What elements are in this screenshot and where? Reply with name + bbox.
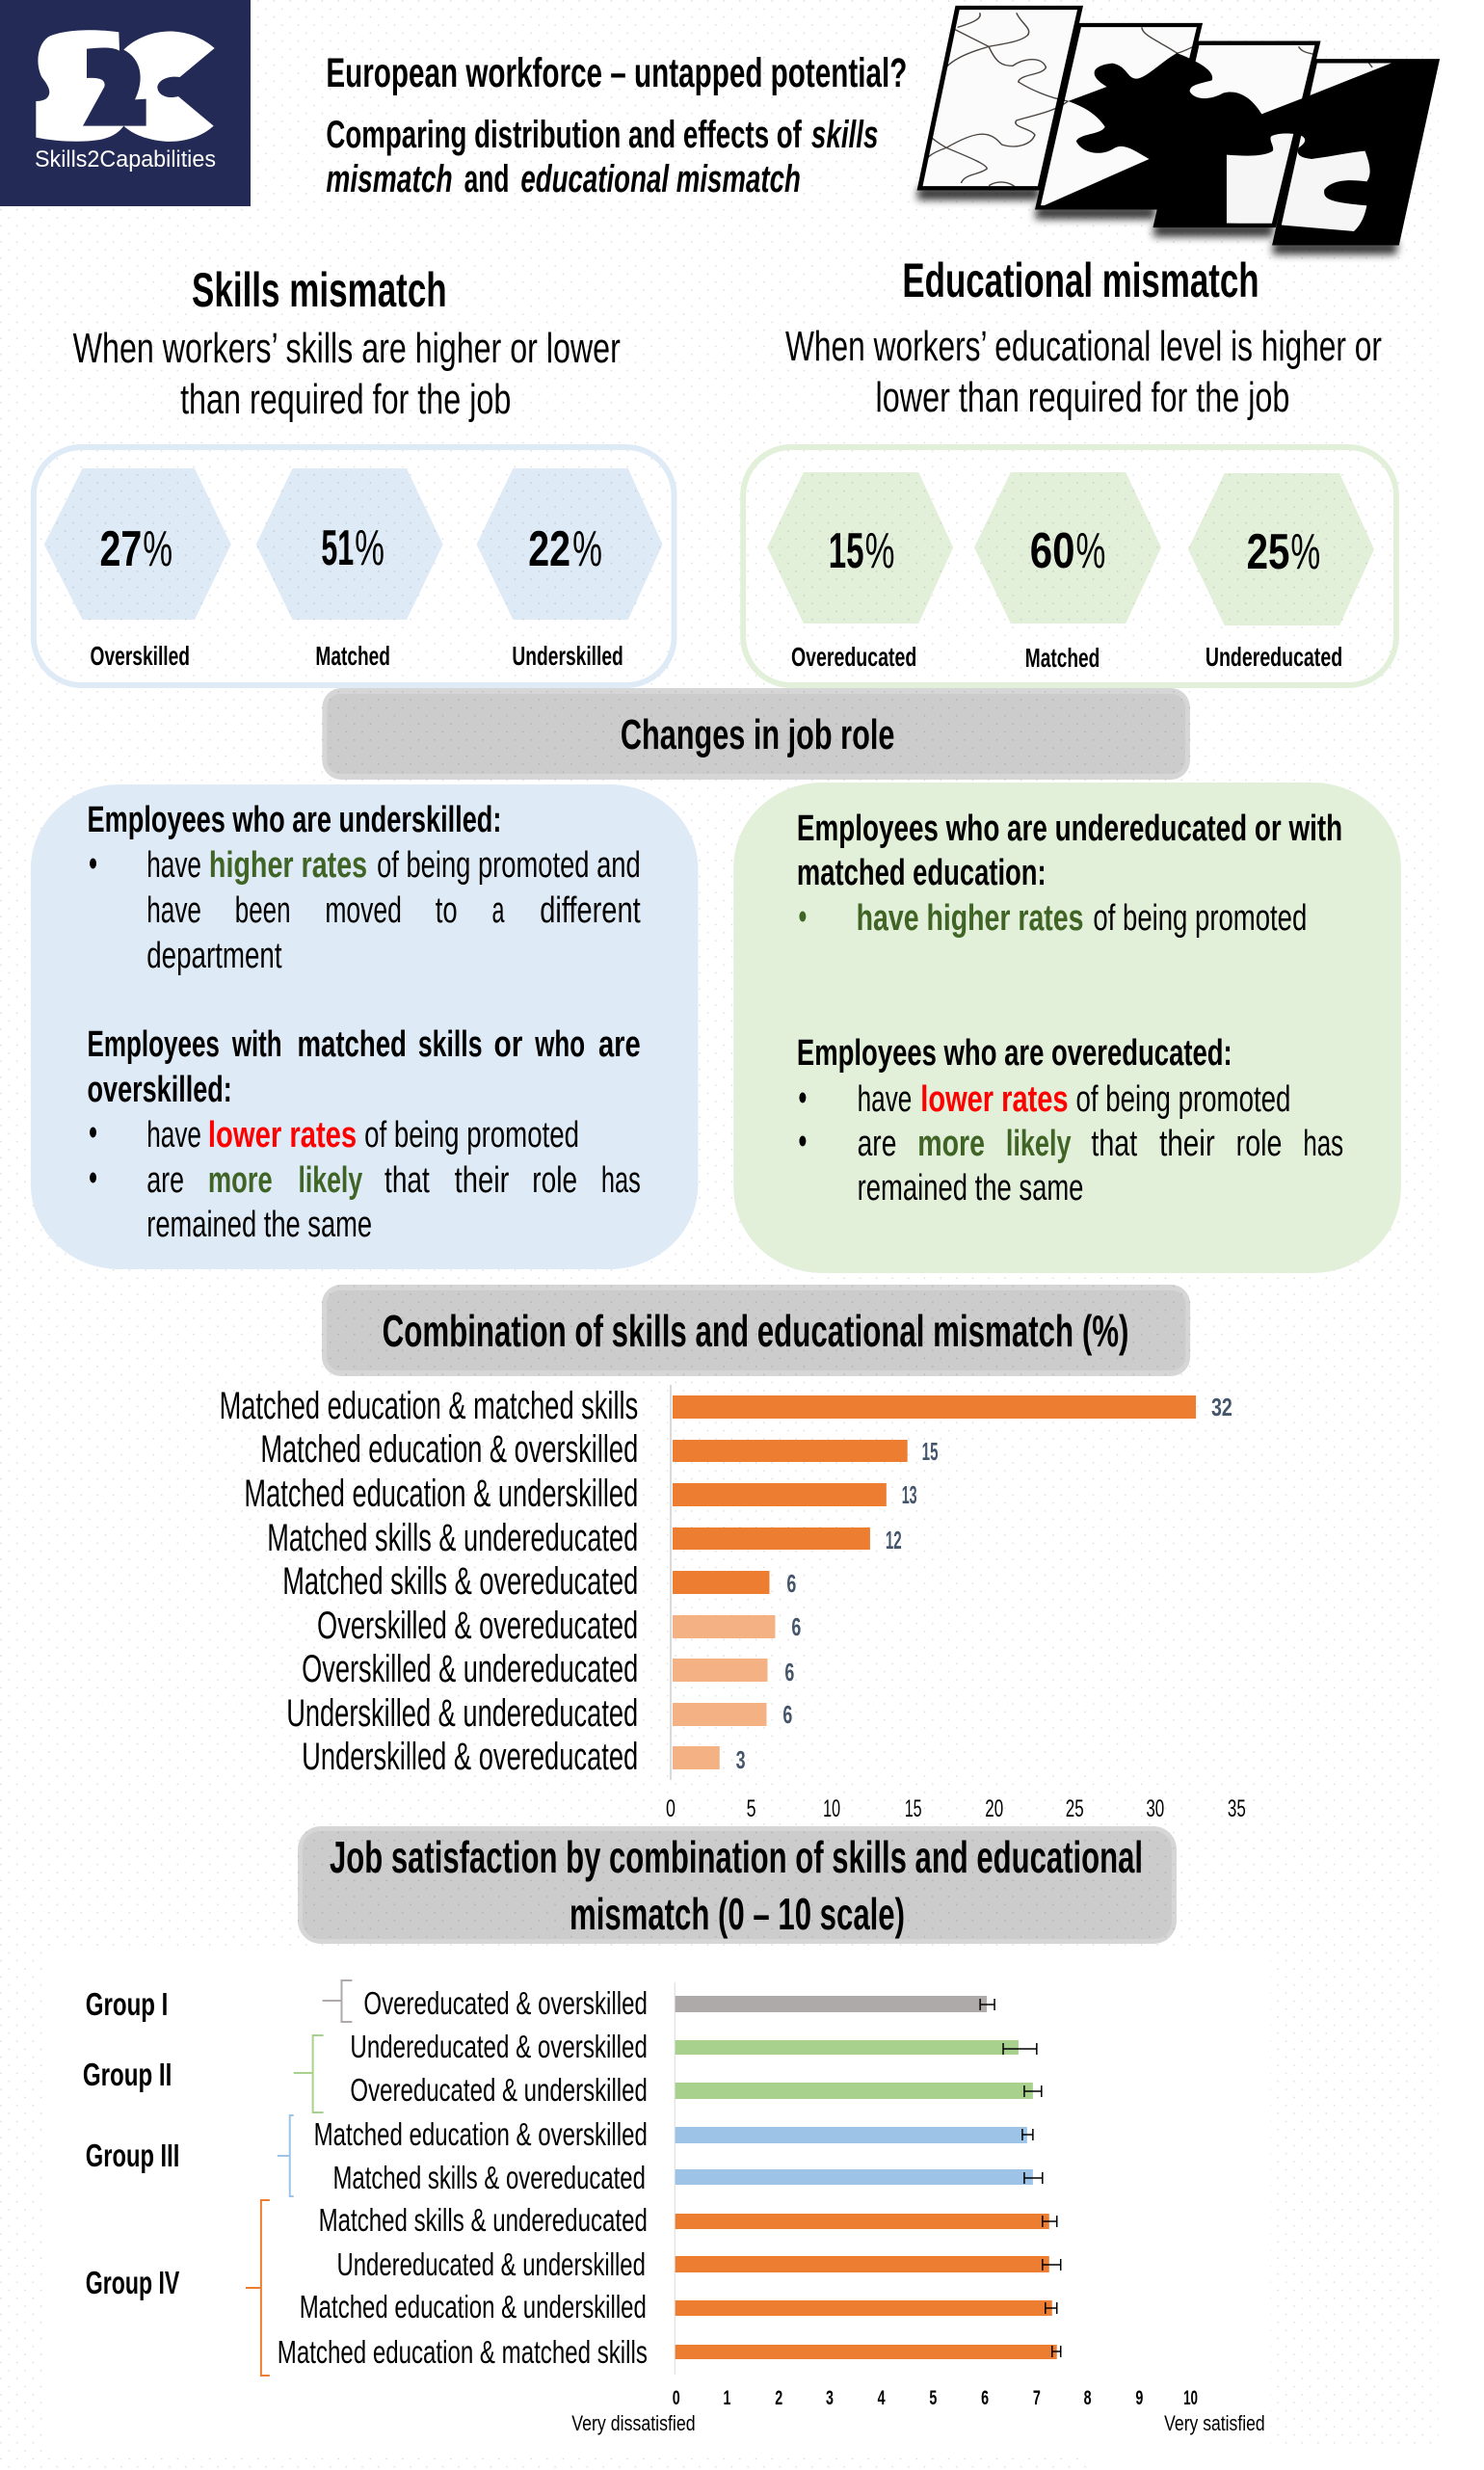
row: Overskilled & overeducated, 6: Overskilled & overeducated <box>317 1605 638 1647</box>
row: Matched education & matched skills, 32: Matched education & matched skills <box>220 1385 638 1427</box>
text: educational mismatch definition <box>785 323 1382 421</box>
title block: European workforce – untapped potential? <box>326 50 907 96</box>
heading: Educational mismatch: Educational mismatch <box>902 253 1259 307</box>
stat: 25% undereducated: Undereducated <box>1206 642 1342 672</box>
text: matched or overskilled employees: or <box>493 1024 523 1065</box>
stat: 15% overeducated: Overeducated <box>791 642 916 672</box>
title block: Comparing distribution and effects of <box>326 114 802 156</box>
row: Matched education & matched skills, 32: 32 <box>1211 1394 1232 1421</box>
row: Overskilled & undereducated, 6: Overskilled & undereducated <box>302 1648 638 1690</box>
row: Matched education & underskilled, 13: Matched education & underskilled <box>244 1473 638 1515</box>
row: Matched education & underskilled, 13: 13 <box>902 1482 917 1509</box>
row: Matched skills & overeducated: Matched skills & overeducated <box>333 2160 646 2195</box>
text: skills mismatch definition: When workers’ skills are higher or lower <box>73 325 621 372</box>
row: Matched education & matched skills, 32 <box>220 1385 1232 1427</box>
text: matched or overskilled employees: that <box>384 1160 430 1201</box>
stat: 60% matched: 60 <box>1030 522 1075 578</box>
x axis labels: 5 <box>747 1795 756 1822</box>
heading: Changes in job role: Changes in job role <box>621 711 894 758</box>
title block: skills <box>811 114 879 156</box>
text: overeducated employees: role <box>1236 1124 1282 1164</box>
text: underskilled employees: different <box>540 890 641 931</box>
row: Matched skills & undereducated, 12: 12 <box>886 1527 902 1554</box>
x axis labels: 30 <box>1146 1795 1164 1822</box>
stat: 60% matched: Matched <box>1025 643 1100 673</box>
text: underskilled employees: moved <box>325 890 402 931</box>
stat: 25% undereducated: % <box>1290 523 1320 579</box>
text: overeducated employees: Employees who are overeducated: <box>797 1033 1232 1074</box>
group labels: Group II <box>83 2057 172 2092</box>
chart axis line <box>670 1385 672 1780</box>
section: combination of mismatch <box>220 1285 1246 1822</box>
x axis labels: 5 <box>929 2387 938 2409</box>
panel: skills distribution <box>34 447 675 685</box>
x axis labels: 35 <box>1228 1795 1246 1822</box>
stat: 15% overeducated: % <box>865 522 894 578</box>
text: matched or overskilled employees: skills <box>418 1024 483 1065</box>
row: Underskilled & undereducated, 6: Underskilled & undereducated <box>286 1692 638 1735</box>
row: Overeducated & underskilled: Overeducated & underskilled <box>350 2072 648 2108</box>
heading: Job satisfaction by combination <box>298 1826 1177 1944</box>
row: Undereducated & underskilled: Undereducated & underskilled <box>336 2246 646 2282</box>
title block <box>326 50 907 200</box>
logo: Skills2Capabilities <box>0 0 251 206</box>
text: matched or overskilled employees: lower rates <box>208 1115 357 1155</box>
row: Overskilled & undereducated, 6: 6 <box>784 1660 794 1687</box>
row: Matched skills & overeducated, 6: Matched skills & overeducated <box>282 1560 638 1603</box>
x axis labels: 8 <box>1084 2387 1092 2409</box>
stat: 22% underskilled: % <box>572 520 602 576</box>
x axis labels: 10 <box>823 1795 840 1822</box>
text: underskilled employees: a <box>491 890 505 931</box>
text: overeducated employees: of being promoted <box>1076 1079 1290 1120</box>
text: matched or overskilled employees: has <box>601 1160 641 1201</box>
text: matched or overskilled employees: Employees <box>88 1024 220 1065</box>
scale label: Very dissatisfied: Very dissatisfied <box>571 2411 696 2435</box>
title block: mismatch <box>326 158 453 200</box>
heading: Combination of skills and educational mismatch: Combination of skills and educational mismatch (%) <box>383 1306 1128 1356</box>
text: underskilled employees: of being promoted and <box>377 845 641 886</box>
group labels: Group I <box>86 1986 168 2022</box>
stat: 15% overeducated: 15 <box>829 522 864 578</box>
text: educational mismatch definition: lower than required for the job <box>876 374 1289 421</box>
text: overeducated employees <box>797 1033 1343 1208</box>
text: underskilled employees: have <box>146 890 201 931</box>
text: matched or overskilled employees: role <box>532 1160 577 1201</box>
text: matched or overskilled employees: likely <box>298 1160 362 1201</box>
x axis labels: 0 <box>673 2387 680 2409</box>
row: Matched education & matched skills: Matched education & matched skills <box>278 2334 648 2370</box>
stat: 27% overskilled: Overskilled <box>91 641 190 671</box>
text: undereducated or matched employees: have higher rates <box>857 898 1083 939</box>
row: Undereducated & overskilled <box>350 2029 1037 2064</box>
text: matched or overskilled employees: of being promoted <box>364 1115 579 1155</box>
text: undereducated or matched employees: of being promoted <box>1093 898 1307 939</box>
x axis labels <box>673 2387 1198 2409</box>
stat: 60% matched: % <box>1076 522 1105 578</box>
panel: education distribution <box>743 447 1396 685</box>
heading: Changes in job role <box>322 688 1190 780</box>
image: jigsaw puzzle panels <box>906 0 1459 257</box>
section: job satisfaction <box>83 1980 1265 2435</box>
panel: job role changes, education <box>733 783 1401 1273</box>
stat: 27% overskilled <box>44 468 231 671</box>
row: Underskilled & undereducated, 6: 6 <box>782 1702 792 1729</box>
text: matched or overskilled employees: more <box>208 1160 273 1201</box>
text: overeducated employees: lower rates <box>920 1079 1069 1120</box>
stat: 60% matched <box>974 472 1161 673</box>
row: Matched skills & undereducated: Matched skills & undereducated <box>319 2202 648 2238</box>
x axis labels: 7 <box>1033 2387 1041 2409</box>
stat: 22% underskilled: 22 <box>528 520 570 576</box>
x axis labels: 6 <box>981 2387 989 2409</box>
stat: 22% underskilled: Underskilled <box>512 641 623 671</box>
text: undereducated or matched employees <box>797 809 1342 939</box>
bracket: group II <box>294 2035 324 2112</box>
x axis labels: 0 <box>666 1795 676 1822</box>
row: Matched education & overskilled, 15: Matched education & overskilled <box>260 1428 638 1471</box>
stat: 25% undereducated: 25 <box>1247 523 1289 579</box>
text: overeducated employees: more <box>917 1124 985 1164</box>
group labels: Group IV <box>86 2265 179 2300</box>
text: skills mismatch definition: than required for the job <box>180 376 511 423</box>
text: matched or overskilled employees: are <box>146 1160 184 1201</box>
text: matched or overskilled employees: remained the same <box>146 1205 372 1245</box>
row: Matched education & overskilled: Matched education & overskilled <box>314 2116 648 2152</box>
row: Matched education & matched skills <box>278 2334 1061 2370</box>
row: Matched skills & undereducated <box>319 2202 1057 2238</box>
row: Matched skills & overeducated, 6: 6 <box>786 1571 796 1598</box>
text: underskilled employees: have <box>146 845 201 886</box>
stat: 51% matched: 51 <box>321 519 354 575</box>
text: matched or overskilled employees: are <box>598 1024 641 1065</box>
x axis labels: 10 <box>1183 2387 1198 2409</box>
text: skills mismatch definition <box>73 325 621 423</box>
text: matched or overskilled employees: have <box>146 1115 201 1155</box>
stat: 51% matched: % <box>355 519 384 575</box>
text: overeducated employees: has <box>1303 1124 1343 1164</box>
heading: Job satisfaction by combination: mismatch (0 – 10 scale) <box>570 1889 905 1939</box>
x axis labels: 20 <box>985 1795 1003 1822</box>
bar chart: combination of mismatch <box>220 1385 1246 1822</box>
heading: Combination of skills and educational mismatch <box>322 1285 1190 1376</box>
text: underskilled employees: been <box>235 890 291 931</box>
stat: 51% matched: Matched <box>315 641 390 671</box>
stat: 27% overskilled: % <box>143 520 172 576</box>
x axis labels: 1 <box>723 2387 731 2409</box>
text: matched or overskilled employees: matched <box>297 1024 407 1065</box>
text: underskilled employees: department <box>146 936 282 976</box>
text: overeducated employees: likely <box>1006 1124 1072 1164</box>
group labels <box>83 1986 179 2300</box>
heading: Skills mismatch: Skills mismatch <box>192 263 447 317</box>
x axis labels: 25 <box>1066 1795 1084 1822</box>
row: Matched skills & undereducated, 12: Matched skills & undereducated <box>267 1517 638 1559</box>
row: Underskilled & overeducated, 3: Underskilled & overeducated <box>302 1736 638 1778</box>
text: overeducated employees: remained the same <box>858 1168 1083 1208</box>
row: Matched education & overskilled <box>314 2116 1033 2152</box>
row: Overeducated & underskilled <box>350 2072 1042 2108</box>
row: Matched skills & overeducated <box>333 2160 1043 2195</box>
x axis labels: 9 <box>1135 2387 1143 2409</box>
text: matched or overskilled employees <box>88 1024 641 1245</box>
group labels: Group III <box>86 2138 179 2173</box>
text: matched or overskilled employees: their <box>455 1160 509 1201</box>
title block: educational mismatch <box>520 158 801 200</box>
x axis labels: 3 <box>826 2387 834 2409</box>
text: underskilled employees: Employees who are underskilled: <box>88 800 501 840</box>
x axis labels: 4 <box>878 2387 886 2409</box>
row: Overeducated & overskilled: Overeducated & overskilled <box>363 1985 648 2021</box>
text: matched or overskilled employees: with <box>231 1024 282 1065</box>
stat: 27% overskilled: 27 <box>99 520 142 576</box>
row: Matched education & overskilled, 15: 15 <box>922 1439 939 1466</box>
row: Undereducated & underskilled <box>336 2246 1061 2282</box>
row: Overskilled & overeducated, 6: 6 <box>791 1614 801 1641</box>
bracket: group IV <box>246 2200 270 2376</box>
bar chart: job satisfaction <box>278 1982 1265 2435</box>
x axis labels <box>666 1795 1246 1822</box>
bracket: group I <box>323 1980 352 2022</box>
stat: 22% underskilled <box>477 468 663 671</box>
row: Overeducated & overskilled <box>363 1985 994 2021</box>
text: undereducated or matched employees: matched education: <box>797 853 1047 893</box>
row: Undereducated & overskilled: Undereducated & overskilled <box>350 2029 648 2064</box>
text: overeducated employees: are <box>858 1124 896 1164</box>
stat: 15% overeducated <box>767 472 953 672</box>
section: overview and job role <box>31 50 1401 1273</box>
panel: job role changes, skills <box>31 784 698 1269</box>
stat: 25% undereducated <box>1188 473 1374 672</box>
x axis labels: 2 <box>775 2387 782 2409</box>
x axis labels: 15 <box>905 1795 922 1822</box>
scale label: Very satisfied: Very satisfied <box>1164 2411 1265 2435</box>
row: Matched education & underskilled <box>300 2289 1057 2324</box>
text: overeducated employees: have <box>858 1079 912 1120</box>
text: overeducated employees: their <box>1159 1124 1215 1164</box>
title block: and <box>464 158 509 200</box>
text: matched or overskilled employees: overskilled: <box>88 1070 232 1110</box>
row: Underskilled & overeducated, 3: 3 <box>736 1747 746 1774</box>
text: matched or overskilled employees: who <box>535 1024 585 1065</box>
bracket: group III <box>278 2115 294 2196</box>
row: Matched education & underskilled: Matched education & underskilled <box>300 2289 647 2324</box>
text: underskilled employees: higher rates <box>209 845 367 886</box>
text: underskilled employees <box>88 800 641 976</box>
stat: 51% matched <box>256 468 443 671</box>
logo: Skills2Capabilities: Skills2Capabilities <box>35 146 216 173</box>
text: overeducated employees: that <box>1091 1124 1138 1164</box>
text: underskilled employees: to <box>436 890 458 931</box>
chart axis line <box>674 1982 676 2375</box>
